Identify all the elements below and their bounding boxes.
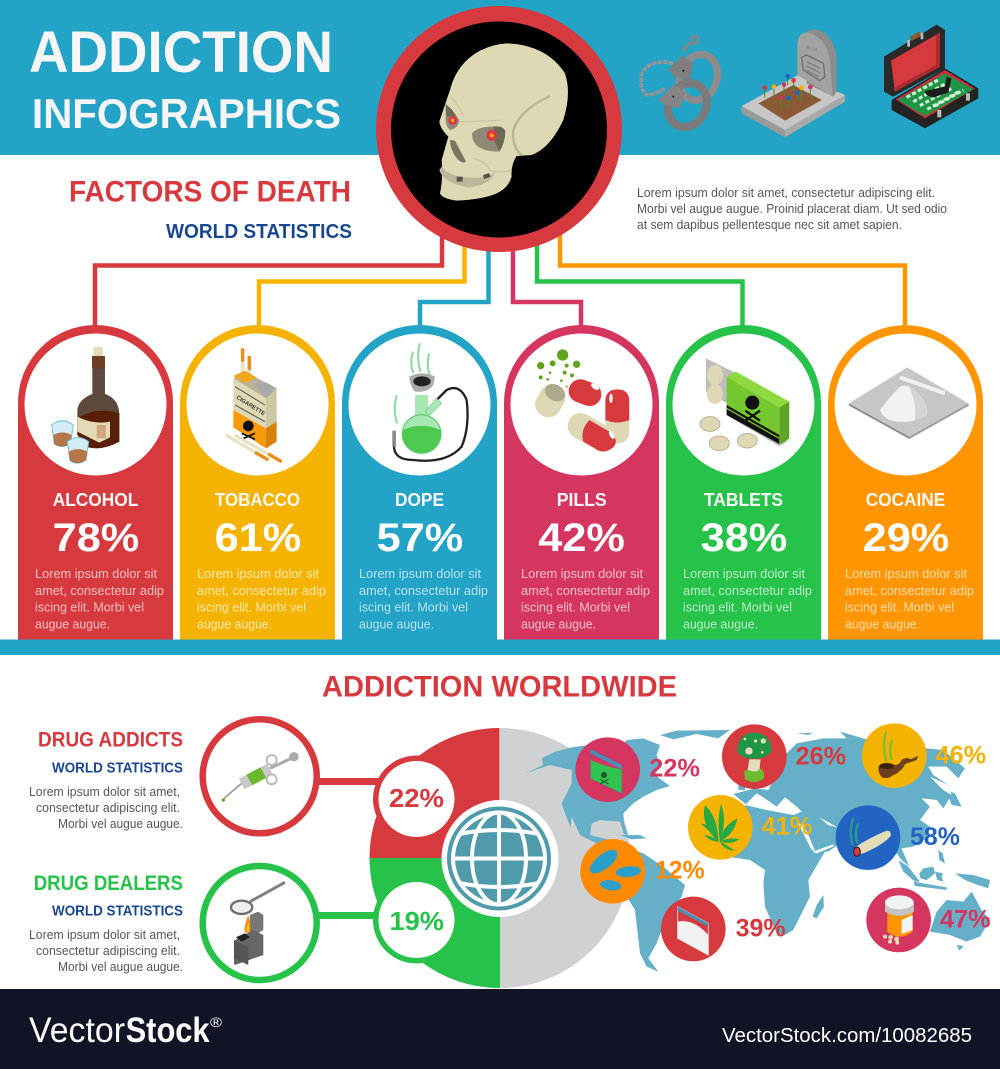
text block: drug addicts: Morbi vel augue augue. [58,817,183,831]
icon: gravestone: R.I.P. [805,45,818,54]
icon: skull [439,43,568,201]
description: iscing elit. Morbi vel [683,600,792,615]
header band [0,0,1000,155]
title: INFOGRAPHICS [32,90,341,137]
description: Lorem ipsum dolor sit [359,566,481,581]
marker: blue pills 12% [580,839,705,904]
panel: alcohol [18,325,173,640]
text block: drug addicts [29,729,183,831]
map markers with icons and values [575,723,991,961]
world map [525,730,990,972]
text block: drug addicts: Lorem ipsum dolor sit amet, [29,785,180,799]
panel: tobacco [180,325,335,640]
description [35,566,164,631]
panel: pills [504,325,659,640]
marker: powder bag 39%: 39% [736,915,786,943]
icon: capsules [531,349,629,457]
title: ADDICTION [29,20,333,85]
marker: mushroom 26%: 26% [796,742,846,770]
text block: drug addicts: WORLD STATISTICS [52,759,183,776]
icon: hookah [392,343,468,461]
description: amet, consectetur adip [845,583,974,598]
description [197,566,326,631]
footer image id: VectorStock.com/10082685 [722,1025,972,1047]
intro text: at sem dapibus pellentesque nec sit amet sapien. [637,218,902,232]
text block: drug dealers: DRUG DEALERS [34,872,183,895]
percentage: 57% [377,516,463,560]
text block: drug dealers [29,872,183,974]
description: augue augue. [197,616,272,631]
icon circle: spoon and lighter [203,866,317,980]
description: iscing elit. Morbi vel [197,600,306,615]
description: amet, consectetur adip [35,583,164,598]
text block: drug addicts: consectetur adipiscing elit. [36,801,180,815]
panel: cocaine [828,325,983,640]
label: TOBACCO [215,489,300,510]
percentage: 42% [538,516,625,560]
donut chart [370,728,630,988]
divider band [0,640,1000,655]
description: amet, consectetur adip [683,583,812,598]
value: 22%: 22% [389,785,444,813]
heading: factors of death: WORLD STATISTICS [166,220,352,243]
marker: poison bag 22%: 22% [649,755,700,783]
label: ALCOHOL [53,489,138,510]
description: iscing elit. Morbi vel [359,600,468,615]
description: amet, consectetur adip [521,583,650,598]
description: augue augue. [683,616,758,631]
icon: cigarette pack: CIGARETTE [235,395,266,417]
panel: dope [342,325,497,640]
footer logo: Stock [126,1011,210,1050]
text block: drug addicts: DRUG ADDICTS [38,729,183,752]
description: augue augue. [359,616,434,631]
icon: bottle and glasses [52,347,119,463]
percentage: 78% [53,516,139,560]
footer logo: Vector [29,1011,125,1050]
connector: addicts [318,778,382,785]
heading: factors of death [69,176,352,243]
text block: drug dealers: WORLD STATISTICS [52,903,183,920]
title [29,20,341,137]
percentage: 38% [701,516,787,560]
description: amet, consectetur adip [197,583,326,598]
description: Lorem ipsum dolor sit [845,566,967,581]
description: amet, consectetur adip [359,583,488,598]
description: augue augue. [521,616,596,631]
description [521,566,650,631]
marker: blue pills 12%: 12% [655,856,705,884]
description: Lorem ipsum dolor sit [683,566,805,581]
description [683,566,812,631]
percentage: 29% [863,516,949,560]
marker: joint 58%: 58% [910,823,960,851]
icon circle: syringe [203,719,317,833]
description: augue augue. [35,616,110,631]
marker: poison bag 22% [575,737,700,802]
marker: joint 58% [836,805,960,870]
icon: powder on plate [849,367,969,439]
icon: tablet box [700,358,792,451]
description: iscing elit. Morbi vel [521,600,630,615]
marker: pill bottle 47% [866,888,991,952]
label: TABLETS [704,489,783,510]
percentage: 61% [215,516,301,560]
marker: smoking pipe 46%: 46% [936,741,986,769]
description: iscing elit. Morbi vel [35,600,144,615]
description: iscing elit. Morbi vel [845,600,954,615]
description: augue augue. [845,616,920,631]
globe icon [442,800,558,917]
text block: drug dealers: Morbi vel augue augue. [58,960,183,974]
marker: pill bottle 47%: 47% [940,905,991,933]
description: Lorem ipsum dolor sit [35,566,157,581]
footer logo: ® [210,1014,223,1030]
marker: cannabis leaf 41% [688,795,812,860]
footer logo [29,1011,223,1050]
icon: briefcase with money and gun [884,25,978,128]
marker: powder bag 39% [661,897,786,961]
marker: mushroom 26% [722,724,846,789]
marker: smoking pipe 46% [862,723,986,788]
description [845,566,974,631]
description [359,566,488,631]
intro text: Morbi vel augue augue. Proinid placerat diam. Ut sed odio [637,202,947,216]
label: DOPE [395,489,444,510]
value: 19%: 19% [390,908,444,936]
panel: tablets [666,325,821,640]
icon: handcuffs [641,36,724,133]
skull medallion [376,6,622,252]
description: Lorem ipsum dolor sit [521,566,643,581]
intro text [637,186,947,232]
text block: drug dealers: consectetur adipiscing elit. [36,944,180,958]
description: Lorem ipsum dolor sit [197,566,319,581]
heading: factors of death: FACTORS OF DEATH [69,176,351,208]
label: COCAINE [866,489,945,510]
intro text: Lorem ipsum dolor sit amet, consectetur adipiscing elit. [637,186,935,200]
connector: dealers [318,912,382,919]
icon: gravestone [742,29,845,137]
connector lines [95,235,905,326]
icon: cigarette pack [226,348,282,462]
text block: drug dealers: Lorem ipsum dolor sit amet, [29,928,180,942]
heading: addiction worldwide: ADDICTION WORLDWIDE [322,670,677,704]
label: PILLS [557,489,607,510]
footer band [0,989,1000,1069]
marker: cannabis leaf 41%: 41% [762,812,812,840]
